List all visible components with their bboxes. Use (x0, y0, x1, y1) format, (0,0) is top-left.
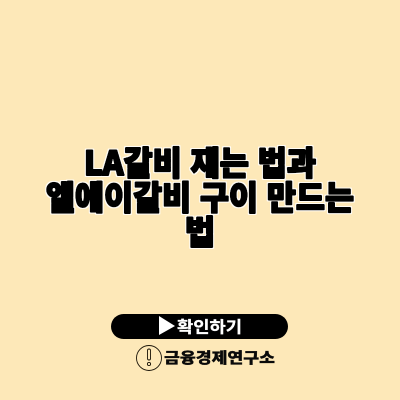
button label: 확인하기 (177, 314, 242, 338)
source name: 금융경제연구소 (164, 347, 275, 368)
title: 법 (185, 206, 215, 254)
button: 확인하기 (111, 314, 288, 339)
title: LA갈비 재는 법과 (84, 137, 316, 185)
icon: play triangle (159, 316, 175, 335)
icon: exclamation circle (136, 346, 162, 370)
title (46, 137, 354, 254)
source logo (136, 346, 275, 370)
title: 엘에이갈비 구이 만드는 (46, 172, 354, 220)
